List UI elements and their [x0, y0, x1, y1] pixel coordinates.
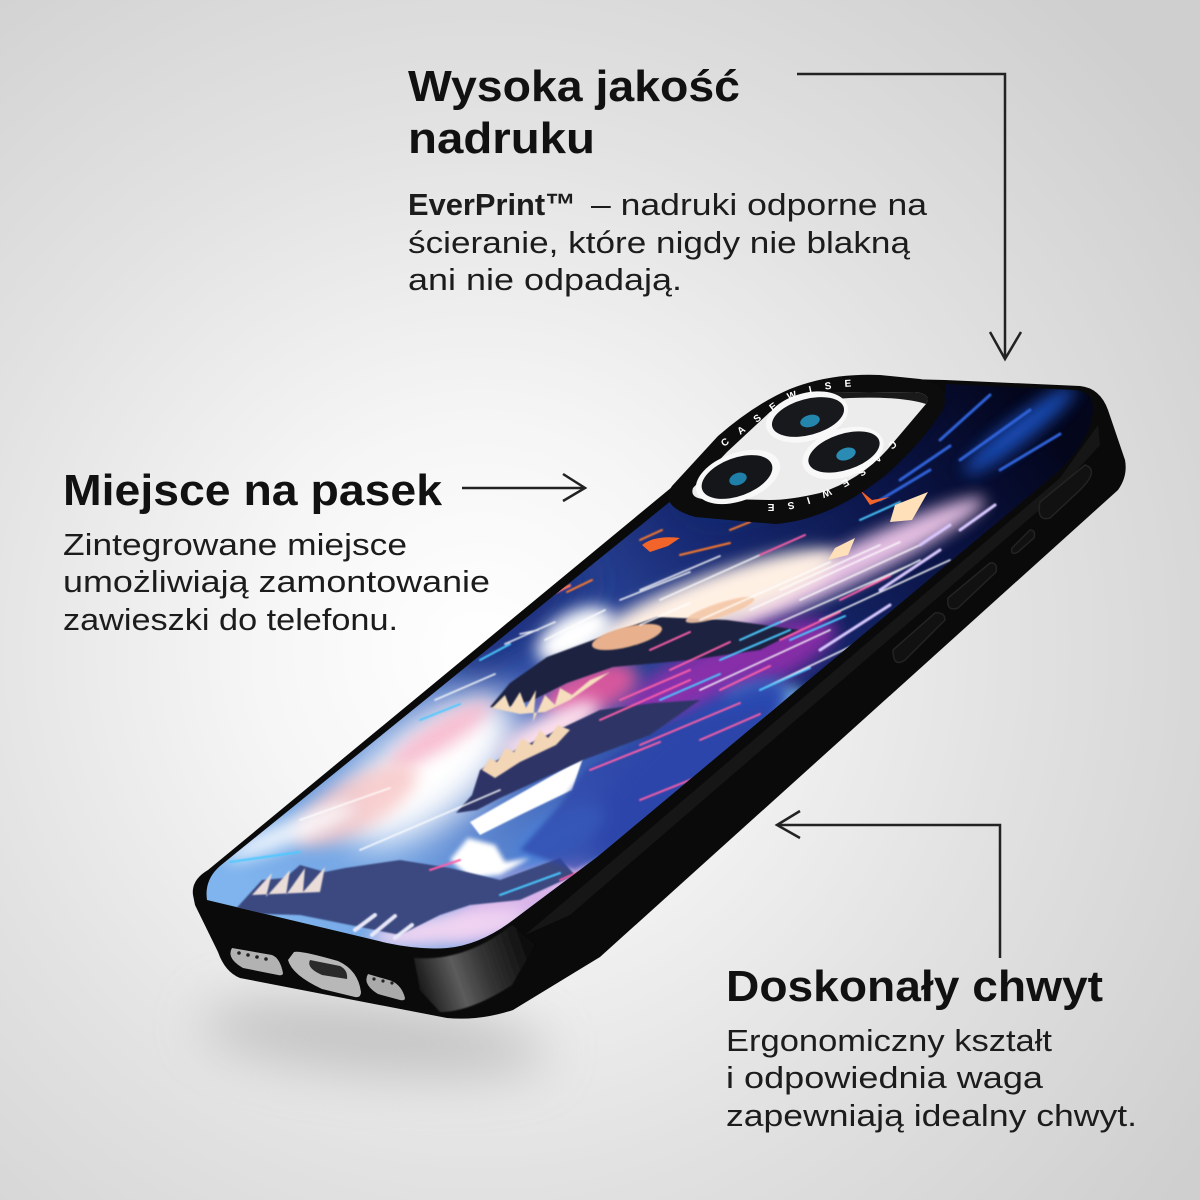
heading: Doskonały chwyt — [726, 962, 1103, 1011]
camera plate — [692, 392, 928, 500]
description — [726, 1023, 1137, 1133]
camera plate inner bevel — [780, 392, 928, 408]
lens top — [760, 383, 854, 451]
description: – nadruki odporne na — [591, 187, 928, 222]
left speaker grille — [230, 948, 283, 975]
dragon lower body — [520, 728, 752, 872]
camera bump — [670, 374, 945, 524]
arrow: grip — [777, 811, 1000, 958]
dragon lower jaw — [456, 700, 700, 813]
description: ścieranie, które nigdy nie blakną — [408, 225, 911, 260]
description: EverPrint™ — [408, 187, 576, 222]
heading: Wysoka jakość — [408, 62, 740, 111]
callout: print quality — [408, 62, 928, 297]
dragon underbody streaks — [355, 915, 412, 938]
description: zawieszki do telefonu. — [63, 602, 398, 637]
description: ani nie odpadają. — [408, 262, 682, 297]
brand text bottom: CASEWISE — [768, 442, 896, 511]
upper teeth — [492, 672, 610, 722]
dragon body — [232, 858, 575, 935]
right speaker grille — [366, 974, 405, 1000]
dragon eye ridge — [591, 622, 663, 652]
description: i odpowiednia waga — [726, 1060, 1044, 1095]
description: zapewniają idealny chwyt. — [726, 1098, 1137, 1133]
lens right — [796, 417, 890, 489]
artwork base — [190, 370, 1110, 970]
callout: grip — [726, 962, 1137, 1133]
phone drop shadow — [198, 987, 552, 1089]
bottom corner gloss — [414, 925, 535, 1012]
dragon brow highlight — [684, 596, 755, 624]
description — [408, 187, 928, 297]
heading: nadruku — [408, 114, 595, 163]
speed streaks — [230, 395, 1060, 895]
description: Zintegrowane miejsce — [63, 527, 407, 562]
brand text top: CASEWISE — [721, 380, 851, 446]
case side sheen — [525, 425, 1100, 935]
charging port — [288, 952, 361, 997]
camera ring — [668, 375, 945, 524]
arrow: strap slot — [462, 474, 585, 501]
bright sparks near camera — [828, 492, 928, 560]
dragon upper jaw — [490, 617, 800, 708]
case body — [193, 378, 1126, 1019]
white cloud near chest — [450, 838, 530, 878]
phone case — [192, 374, 1126, 1019]
printed dragon artwork — [206, 384, 1093, 948]
lens lower left — [688, 439, 788, 515]
heading: Miejsce na pasek — [63, 466, 443, 515]
description: Ergonomiczny kształt — [726, 1023, 1052, 1058]
side volume and power buttons — [893, 465, 1091, 662]
artwork glow layers — [221, 340, 1083, 955]
dragon spikes — [252, 867, 325, 897]
heading — [408, 62, 740, 163]
arrow: print quality — [797, 74, 1021, 359]
white patch under jaw — [470, 758, 583, 835]
description — [63, 527, 490, 637]
lower teeth — [482, 725, 570, 778]
description: umożliwiają zamontowanie — [63, 564, 490, 599]
orange flame accents — [642, 490, 890, 552]
callout: strap slot — [63, 466, 490, 637]
